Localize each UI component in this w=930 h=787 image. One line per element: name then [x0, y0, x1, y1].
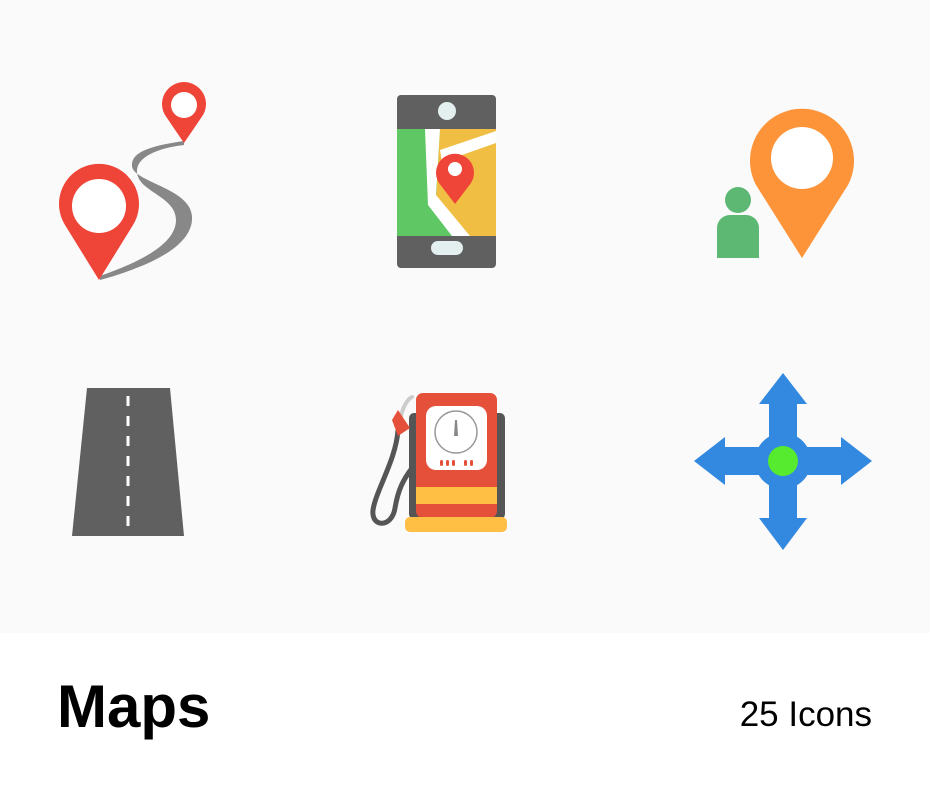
icon: road: [72, 388, 184, 536]
icon: four-way arrows: [694, 373, 872, 550]
icon: fuel pump: [373, 393, 507, 532]
icon: phone map: [397, 95, 496, 268]
icon: person with location pin: [717, 109, 854, 258]
title: Maps: [57, 673, 210, 740]
icon count: 25 Icons: [740, 695, 872, 734]
icon: route with pins: [59, 82, 206, 280]
